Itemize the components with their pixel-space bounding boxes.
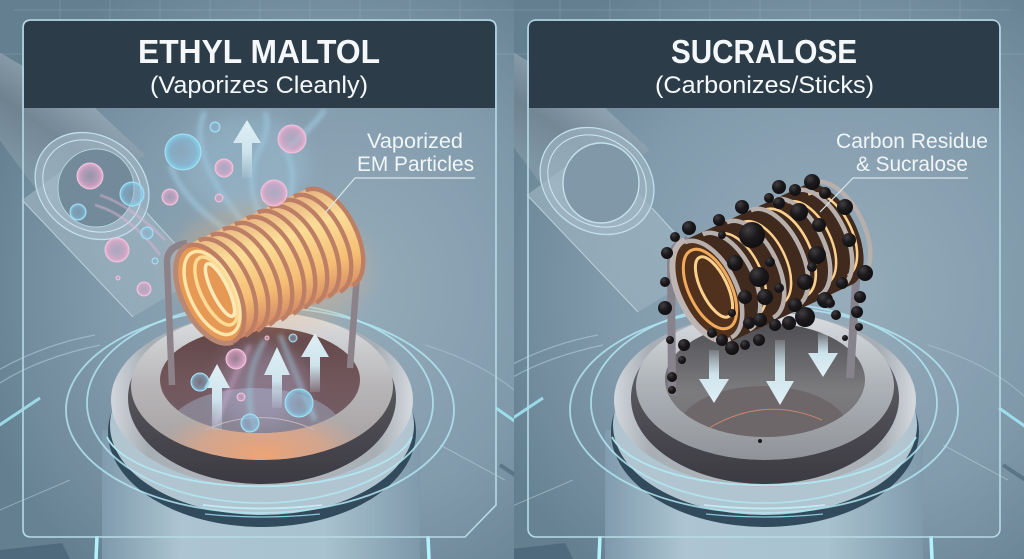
arrow: middle down [766, 340, 794, 405]
callout: carbon residue [820, 130, 988, 212]
subtitle: (Carbonizes/Sticks) [655, 72, 874, 99]
callout: vaporized EM particles: Vaporized [367, 130, 463, 153]
steam wisps [170, 110, 325, 430]
panel frame [528, 20, 1000, 537]
panel: ethyl maltol [0, 20, 530, 559]
bubbles: EM particles [70, 122, 313, 432]
title: ETHYL MALTOL [138, 33, 380, 70]
callout: vaporized EM particles: EM Particles [357, 153, 474, 176]
panel: sucralose [493, 20, 1024, 559]
header: ethyl maltol [24, 21, 495, 108]
illustration: carbonized coil [658, 171, 884, 395]
icon: down arrows [699, 333, 838, 405]
callout: vaporized EM particles [325, 130, 475, 213]
subtitle: (Vaporizes Cleanly) [150, 72, 368, 99]
illustration: vape tube [514, 53, 680, 312]
arrow: left down [699, 350, 729, 403]
arrow: right down [808, 333, 838, 377]
arrow: middle up [264, 347, 290, 408]
icon: up arrows [204, 120, 329, 430]
callout: carbon residue: Carbon Residue [836, 130, 988, 153]
header: sucralose [529, 21, 999, 108]
arrow: left up [204, 364, 230, 430]
arrow: top up [233, 120, 261, 178]
carbon residue blobs [658, 174, 873, 394]
illustration: coil base [0, 303, 530, 559]
arrow: right up [301, 333, 329, 392]
callout: carbon residue: & Sucralose [856, 153, 968, 176]
illustration: coil base [493, 303, 1024, 559]
panel frame [23, 20, 496, 537]
illustration: vape tube [0, 48, 180, 317]
title: SUCRALOSE [671, 33, 857, 70]
illustration: glowing coil [162, 178, 377, 385]
